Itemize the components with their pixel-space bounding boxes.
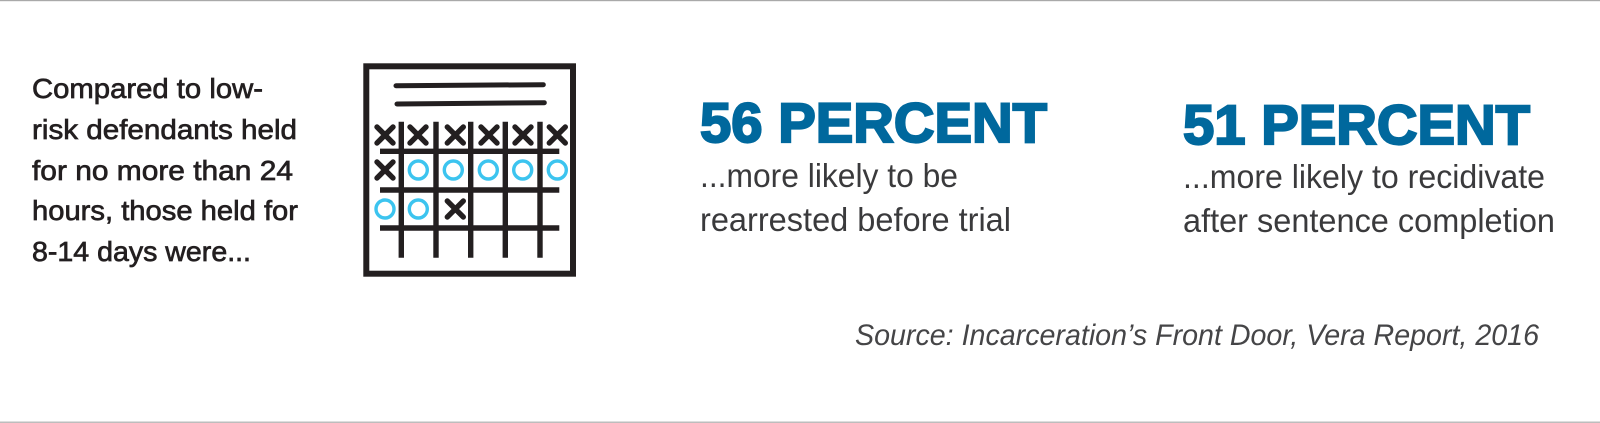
stat: 56 percent rearrested (700, 91, 1047, 238)
source note: Source: Incarceration’s Front Door, Vera Report, 2016 (855, 319, 1539, 352)
stat heading: 56 percent: 56 PERCENT (700, 91, 1047, 154)
stat description: recidivate after sentence completion: ...more likely to recidivate (1183, 158, 1545, 195)
stat description: rearrested before trial: rearrested before trial (700, 201, 1011, 238)
text block: comparison intro: hours, those held for (32, 195, 298, 226)
stat heading: 51 percent: 51 PERCENT (1183, 93, 1530, 156)
text block: comparison intro: Compared to low- (32, 73, 263, 104)
icon: calendar with X and O marks (366, 66, 573, 274)
stat description: rearrested before trial: ...more likely to be (700, 157, 958, 194)
stat: 51 percent recidivate (1183, 93, 1555, 239)
stat description: recidivate after sentence completion (1183, 158, 1555, 239)
stat description: recidivate after sentence completion: after sentence completion (1183, 202, 1555, 239)
stat description: rearrested before trial (700, 157, 1011, 238)
text block: comparison intro: for no more than 24 (32, 155, 293, 186)
text block: comparison intro: 8-14 days were... (32, 236, 251, 267)
text block: comparison intro: risk defendants held (32, 114, 297, 145)
text block: comparison intro (32, 73, 298, 267)
